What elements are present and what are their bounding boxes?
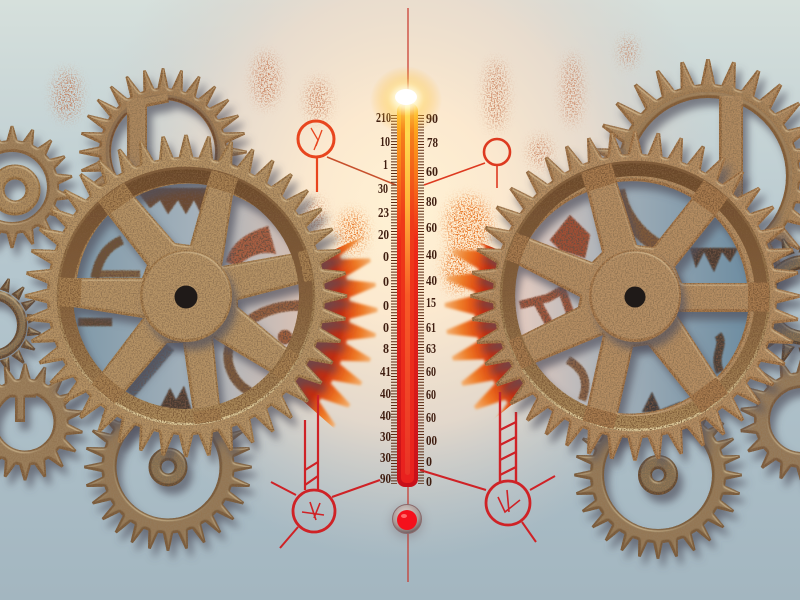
thermometer flame glow (370, 66, 442, 134)
thermometer scale numbers: right: 80 (426, 195, 437, 210)
left gear hub (140, 250, 232, 342)
small gear: lower right (530, 377, 760, 593)
thermometer scale numbers: right: 60 (426, 411, 436, 426)
thermometer scale numbers: left: 0 (383, 321, 389, 336)
right gear window backdrop (507, 168, 763, 424)
thermometer scale numbers: right: 60 (426, 221, 437, 236)
small gear: lower left (0, 361, 93, 500)
small gear: top left (35, 54, 265, 270)
orange rust speckle near thermometer (338, 197, 490, 292)
thermometer scale numbers: left: 40 (380, 387, 391, 402)
thermometer scale numbers: left: 0 (383, 299, 389, 314)
red annotation: bottom right callout (420, 392, 555, 542)
thermometer scale numbers: right: 60 (426, 388, 436, 403)
thermometer scale numbers: left: 8 (383, 342, 389, 357)
red annotation: bottom left callout (271, 395, 380, 548)
left gear axle hole (174, 286, 198, 308)
small gear: top right (529, 40, 800, 340)
thermometer centre axis line (407, 8, 409, 582)
right gear axle hole (624, 286, 646, 308)
thermometer scale numbers: left (376, 111, 391, 487)
rust speckle patches (54, 38, 635, 231)
thermometer scale numbers: left: 1 (383, 158, 388, 173)
thermometer bulb (391, 504, 423, 538)
left gear recessed channel and spoke ends (58, 168, 314, 424)
thermometer scale numbers: left: 10 (380, 135, 390, 150)
large gear: left (0, 120, 395, 560)
thermometer scale numbers: right: 0 (426, 455, 432, 470)
thermometer scale numbers: left: 0 (383, 250, 389, 265)
small gear: far left (0, 123, 83, 269)
thermometer scale numbers: right: 63 (426, 342, 436, 357)
thermometer scale numbers: right: 40 (426, 274, 437, 289)
thermometer tube (397, 103, 418, 487)
thermometer scale numbers: right: 60 (426, 365, 436, 380)
dark gear fragments: left edge (0, 273, 49, 391)
hot orange gear teeth behind left gear (296, 238, 379, 428)
thermometer scale numbers: left: 41 (380, 365, 391, 380)
thermometer scale numbers: left: 90 (380, 472, 391, 487)
large gear: right (408, 116, 800, 565)
rusted gears seen through right gear windows (520, 190, 738, 412)
thermometer scale numbers: left: 210 (376, 111, 391, 126)
red annotation: top left callout (298, 121, 396, 192)
small gear: lower centre left (40, 369, 270, 585)
thermometer scale numbers: right: 15 (426, 296, 436, 311)
hot orange gear teeth behind right gear (443, 240, 523, 418)
thermometer scale numbers: right: 61 (426, 321, 436, 336)
thermometer scale numbers: left: 30 (380, 430, 391, 445)
thermometer scale ticks (394, 115, 421, 484)
thermometer scale numbers: left: 30 (380, 451, 391, 466)
thermometer scale numbers: right: 0 (426, 475, 432, 490)
thermometer scale numbers: right: 78 (427, 136, 438, 151)
thermometer scale numbers: left: 20 (378, 228, 389, 243)
thermometer scale numbers: right: 00 (426, 434, 437, 449)
thermometer scale numbers: left: 0 (383, 275, 389, 290)
red annotation: top right callout (424, 139, 510, 188)
dark gear fragments: right edge (714, 232, 800, 387)
right gear hub (589, 250, 681, 342)
small gear: far right lower (715, 355, 800, 503)
left gear window backdrop (64, 174, 308, 418)
right gear recessed channel and spoke ends (501, 162, 769, 430)
thermometer scale numbers: left: 40 (380, 409, 391, 424)
rusted gears seen through left gear windows (78, 188, 305, 412)
thermometer scale numbers: right: 90 (426, 112, 438, 127)
thermometer scale numbers: right: 60 (426, 165, 438, 180)
thermometer scale numbers: left: 30 (378, 182, 388, 197)
thermometer scale numbers: left: 23 (378, 206, 389, 221)
thermometer scale numbers: right (426, 112, 438, 490)
thermometer scale numbers: right: 40 (426, 248, 437, 263)
